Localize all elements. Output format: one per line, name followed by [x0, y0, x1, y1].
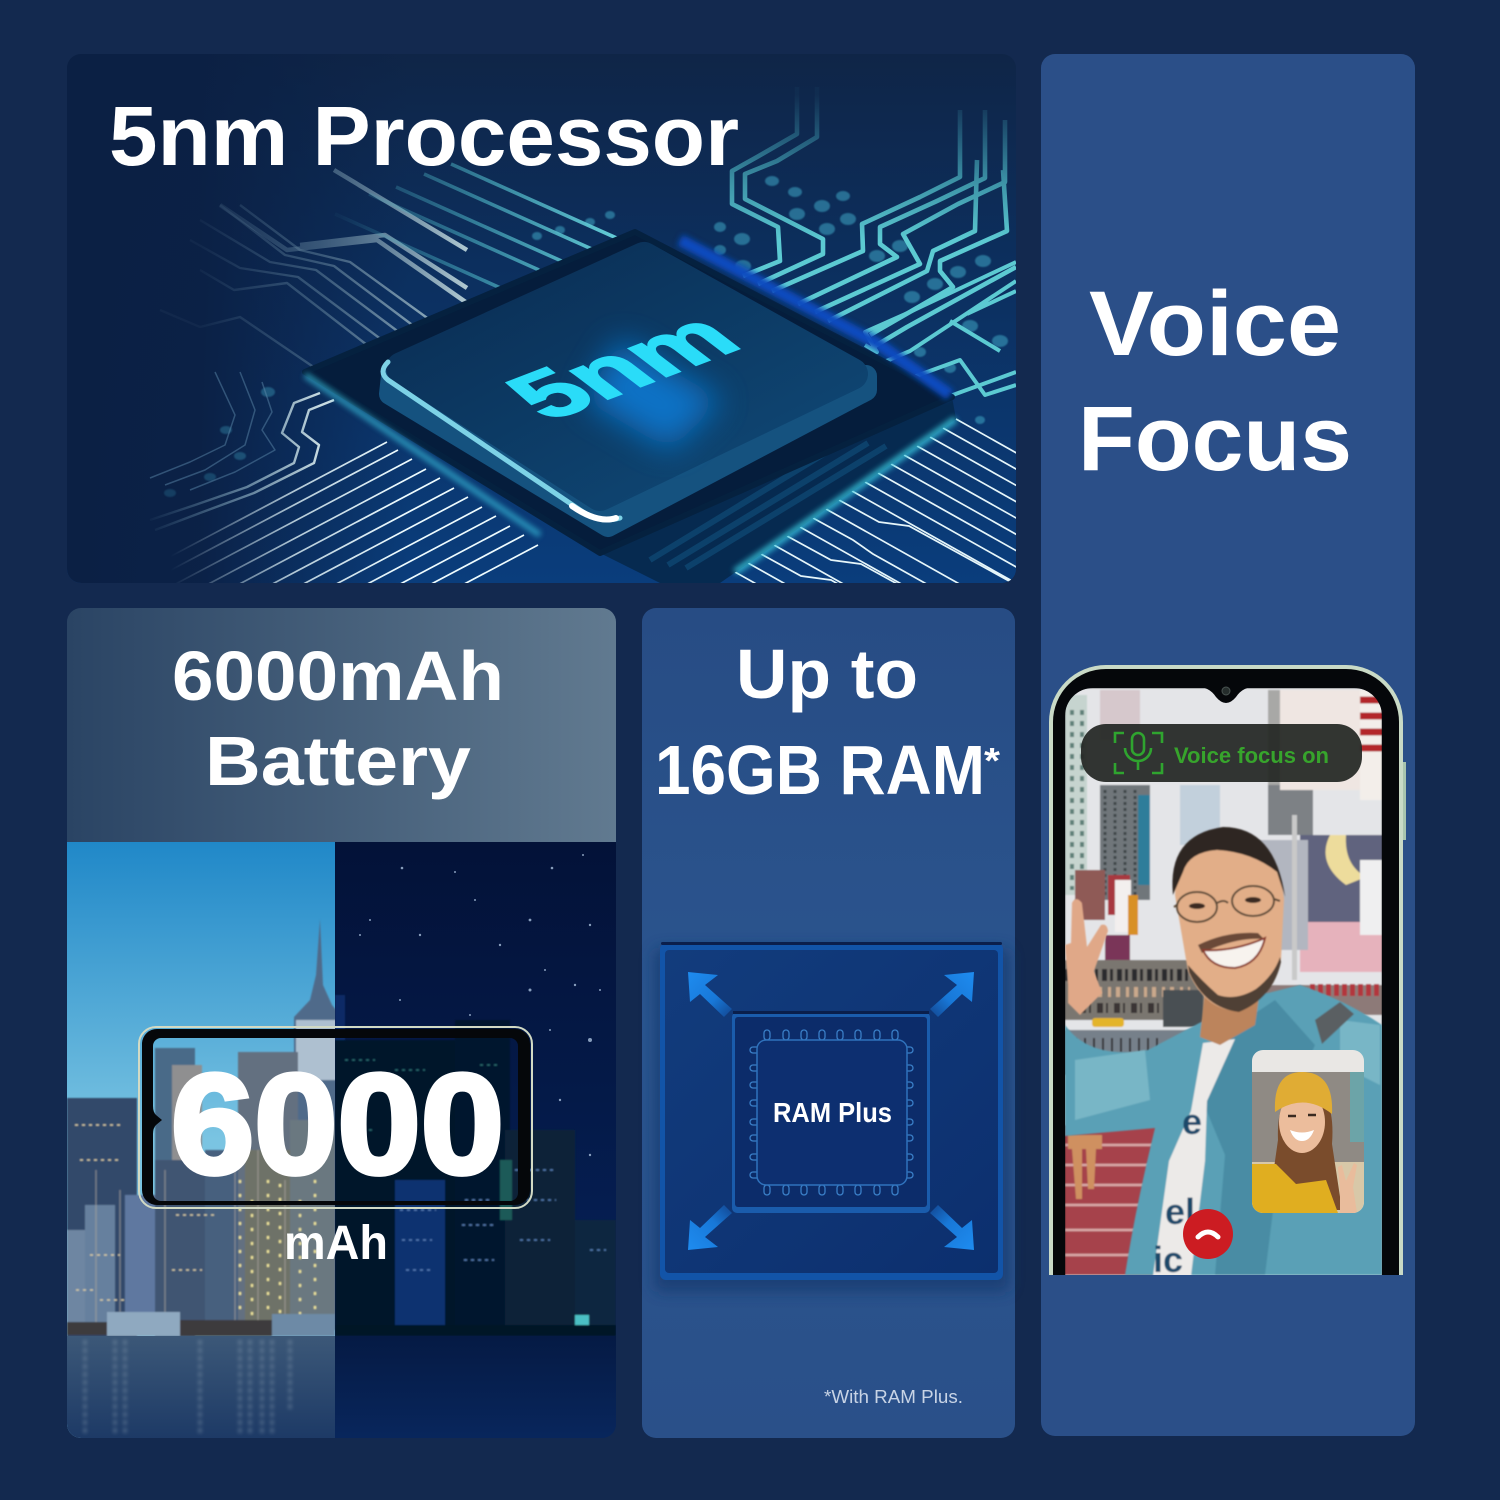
heading: Voice Focus	[1078, 273, 1352, 490]
arrow: bottom right	[930, 1205, 974, 1250]
chip 5nm mark: 5nm	[485, 299, 760, 434]
traces: upper left band	[220, 170, 467, 303]
water night	[335, 1336, 616, 1438]
arrow: top left	[688, 972, 732, 1017]
face	[1175, 843, 1284, 1011]
heading: Up to 16GB RAM: 16GB RAM	[655, 731, 985, 809]
RAM panel background	[642, 608, 1015, 1438]
shirt print: e	[1182, 1101, 1202, 1142]
video inset	[1252, 1050, 1364, 1213]
heading: 6000mAh Battery: Battery	[205, 722, 471, 800]
circuit board dots	[164, 176, 1008, 497]
board left shade	[67, 100, 376, 583]
woman hair	[1270, 1088, 1342, 1210]
woman face	[1279, 1091, 1325, 1153]
mAh unit: mAh	[284, 1217, 388, 1270]
skyline day	[67, 919, 342, 1338]
pill label: Voice focus on	[1174, 743, 1329, 768]
heading: 6000mAh Battery: 6000mAh	[172, 637, 504, 715]
traces: upper right cyan	[732, 87, 1016, 349]
notch	[1200, 687, 1252, 703]
chip top face	[402, 258, 852, 495]
mouth	[1203, 938, 1265, 968]
strap	[1315, 1002, 1354, 1044]
6000 figure: 6000	[171, 1045, 504, 1204]
socket lower wedge	[600, 397, 956, 583]
chip side	[390, 376, 866, 526]
eyes	[1189, 897, 1261, 909]
heading: Voice Focus: Focus	[1078, 388, 1352, 490]
socket shadow	[305, 232, 952, 553]
heading: 5nm Processor: 5nm Processor	[109, 89, 739, 183]
chip bright edge	[383, 362, 620, 520]
stars	[359, 854, 601, 1156]
circuit board background	[67, 202, 1016, 583]
night side sky	[335, 842, 616, 1438]
heading: 6000mAh Battery	[172, 637, 504, 800]
chip corner highlight	[572, 506, 616, 520]
woman beanie	[1275, 1072, 1332, 1114]
traces: upper left grey	[202, 204, 428, 366]
battery header band	[67, 608, 616, 843]
jacket	[1065, 985, 1382, 1275]
chip glow square	[585, 340, 722, 450]
traces: lower right	[735, 419, 1166, 690]
skyline night	[335, 995, 616, 1336]
pill: voice focus on	[1081, 724, 1362, 782]
arrow: bottom left	[688, 1205, 732, 1250]
mustache	[1198, 933, 1264, 953]
shirt print	[1153, 1101, 1202, 1280]
socket glow left	[305, 375, 540, 535]
traces: upper centre teal	[335, 164, 621, 290]
voice panel background	[1041, 54, 1415, 1436]
water day	[67, 1336, 335, 1438]
panel: 5nm processor	[67, 54, 1016, 583]
heading: Up to 16GB RAM: Up to	[736, 635, 918, 713]
RAM Plus chip	[654, 942, 1010, 1292]
traces: lower left	[177, 441, 538, 583]
t-shirt	[1153, 1039, 1235, 1276]
woman top	[1252, 1164, 1338, 1213]
water reflections	[85, 1340, 290, 1435]
person: man	[1065, 827, 1382, 1280]
chip pins	[750, 1030, 913, 1195]
phone bezel	[1053, 669, 1399, 1275]
heading: Up to 16GB RAM: *	[984, 740, 1000, 781]
panel: voice focus	[1041, 54, 1415, 1436]
beard	[1188, 957, 1281, 1012]
background legs	[1068, 1135, 1102, 1199]
glasses	[1174, 886, 1280, 922]
panel: battery	[67, 608, 616, 1438]
screen photo	[1065, 688, 1382, 1280]
socket glow	[735, 419, 956, 572]
inner chip plate	[732, 1011, 930, 1213]
traces: left faint	[150, 372, 275, 490]
footnote: *With RAM Plus.	[824, 1387, 963, 1407]
icon: microphone	[1115, 733, 1162, 773]
arrow: top right	[930, 972, 974, 1017]
phone body	[1049, 665, 1403, 1275]
traces: left squiggles	[150, 393, 334, 530]
hair	[1172, 827, 1285, 897]
side button	[1403, 762, 1406, 840]
shirt print: ic	[1153, 1239, 1183, 1280]
hand	[1065, 899, 1108, 1015]
day side sky	[67, 842, 335, 1438]
heading: Up to 16GB RAM	[655, 635, 1000, 809]
socket blue glow	[680, 240, 950, 395]
connector stripes	[650, 438, 886, 568]
RAM Plus label: RAM Plus	[773, 1097, 892, 1128]
end call button	[1183, 1209, 1233, 1259]
heading: Voice Focus: Voice	[1089, 273, 1341, 375]
shirt print: el	[1165, 1191, 1195, 1232]
panel: RAM	[642, 608, 1015, 1438]
neck	[1200, 990, 1260, 1045]
woman hand	[1338, 1163, 1357, 1213]
phone landscape	[139, 1027, 532, 1208]
phone	[1049, 665, 1406, 1280]
woman smile	[1290, 1130, 1314, 1141]
woman eyes	[1288, 1115, 1316, 1116]
traces: right side	[865, 262, 1016, 396]
chip inner pad	[757, 1040, 907, 1185]
